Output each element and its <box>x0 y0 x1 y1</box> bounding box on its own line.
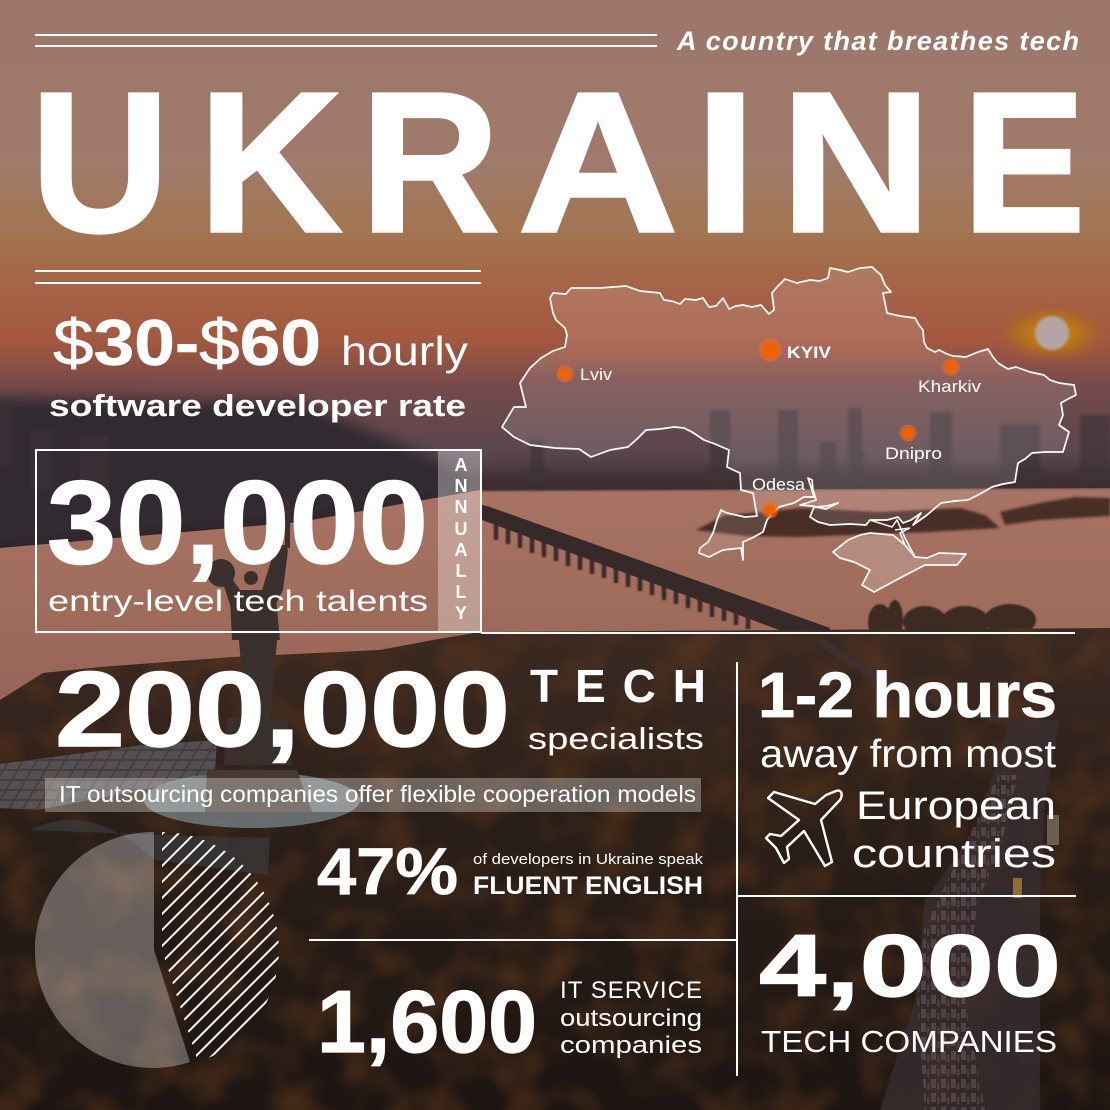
map outline <box>502 267 1076 560</box>
Azov detail <box>870 520 915 557</box>
city marker: Lviv <box>556 365 613 384</box>
main title: U <box>31 52 169 274</box>
city marker: Dnipro: Dnipro <box>885 444 942 463</box>
rate caption: software developer rate <box>49 388 466 423</box>
annually vertical text: U <box>454 519 468 539</box>
rules under title <box>35 271 481 283</box>
top rules <box>35 35 657 46</box>
icon: airplane <box>766 791 842 866</box>
tech companies caption: TECH COMPANIES <box>761 1024 1057 1059</box>
memorial plaza <box>0 718 360 875</box>
stat: flight time: countries <box>852 832 1056 876</box>
main title: A <box>518 52 678 274</box>
pie slice: solid <box>35 832 190 1068</box>
companies caption: outsourcing <box>560 1005 702 1032</box>
Crimea outline <box>833 533 966 592</box>
companies caption: IT SERVICE <box>560 977 702 1004</box>
far bank trees <box>868 600 1036 640</box>
stat: 47% English: 47% <box>317 834 458 908</box>
section dividers <box>309 633 1076 1076</box>
stat: flight time: 1-2 hours <box>758 659 1057 731</box>
annually vertical text: A <box>454 455 468 475</box>
main title <box>31 52 1085 274</box>
city marker: Lviv: Lviv <box>580 365 613 384</box>
main title: I <box>695 52 756 274</box>
main title: N <box>781 52 931 274</box>
city marker: Odesa: Odesa <box>752 475 806 494</box>
Mother Ukraine statue <box>207 498 290 718</box>
annually vertical text: L <box>456 582 466 602</box>
away from most: away from most <box>760 733 1056 776</box>
hourly rate block <box>49 306 469 423</box>
fluent english: FLUENT ENGLISH <box>473 872 703 900</box>
stat: 1,600 companies <box>317 972 702 1071</box>
TECH label: TECH <box>530 660 706 712</box>
city marker: Dnipro <box>885 424 942 463</box>
rate value: $30-$60 <box>53 306 321 379</box>
city marker: Odesa <box>752 475 806 518</box>
annually vertical text: Y <box>455 603 467 623</box>
companies caption <box>560 977 702 1059</box>
specialists label: specialists <box>528 721 704 756</box>
annually vertical text: L <box>456 561 466 581</box>
city marker: Kharkiv: Kharkiv <box>918 377 982 396</box>
pie slice: hatched <box>162 832 279 1058</box>
city marker: Kyiv: KYIV <box>787 343 832 362</box>
English caption: of developers in Ukraine speak <box>473 851 704 868</box>
city marker: Kharkiv <box>918 358 982 396</box>
panel: map of Ukraine <box>502 267 1076 592</box>
stat: 200,000 tech specialists <box>55 649 706 769</box>
highway <box>820 640 1060 1110</box>
stat: 1,600 companies: 1,600 <box>317 972 537 1071</box>
annually vertical text: A <box>454 540 468 560</box>
main title: R <box>361 52 499 274</box>
stat: 4,000 tech companies <box>759 916 1061 1059</box>
annually vertical text: N <box>454 476 468 496</box>
bridge <box>482 505 830 634</box>
annually vertical text <box>454 455 468 623</box>
tagline: A country that breathes tech <box>676 26 1079 56</box>
pie chart <box>34 832 279 1068</box>
main title: K <box>199 52 342 274</box>
city marker: Kyiv <box>758 338 832 362</box>
30,000 number: 30,000 <box>47 457 428 589</box>
annually band <box>438 450 481 632</box>
stat: 47% English <box>317 834 704 908</box>
panel: entry-level talents box <box>36 450 481 632</box>
main title: E <box>963 52 1085 274</box>
hourly label: hourly <box>341 328 469 374</box>
talents caption: entry-level tech talents <box>48 585 428 618</box>
stat: flight time <box>758 659 1057 876</box>
European countries: European <box>856 784 1056 828</box>
outsourcing caption band: IT outsourcing companies offer flexible cooperation models <box>59 781 696 807</box>
companies caption: companies <box>560 1032 702 1059</box>
annually vertical text: N <box>454 497 468 517</box>
stat: 200,000 tech specialists: 200,000 <box>55 649 510 769</box>
stat: 4,000 tech companies: 4,000 <box>759 916 1061 1015</box>
outsourcing caption band <box>45 778 701 812</box>
